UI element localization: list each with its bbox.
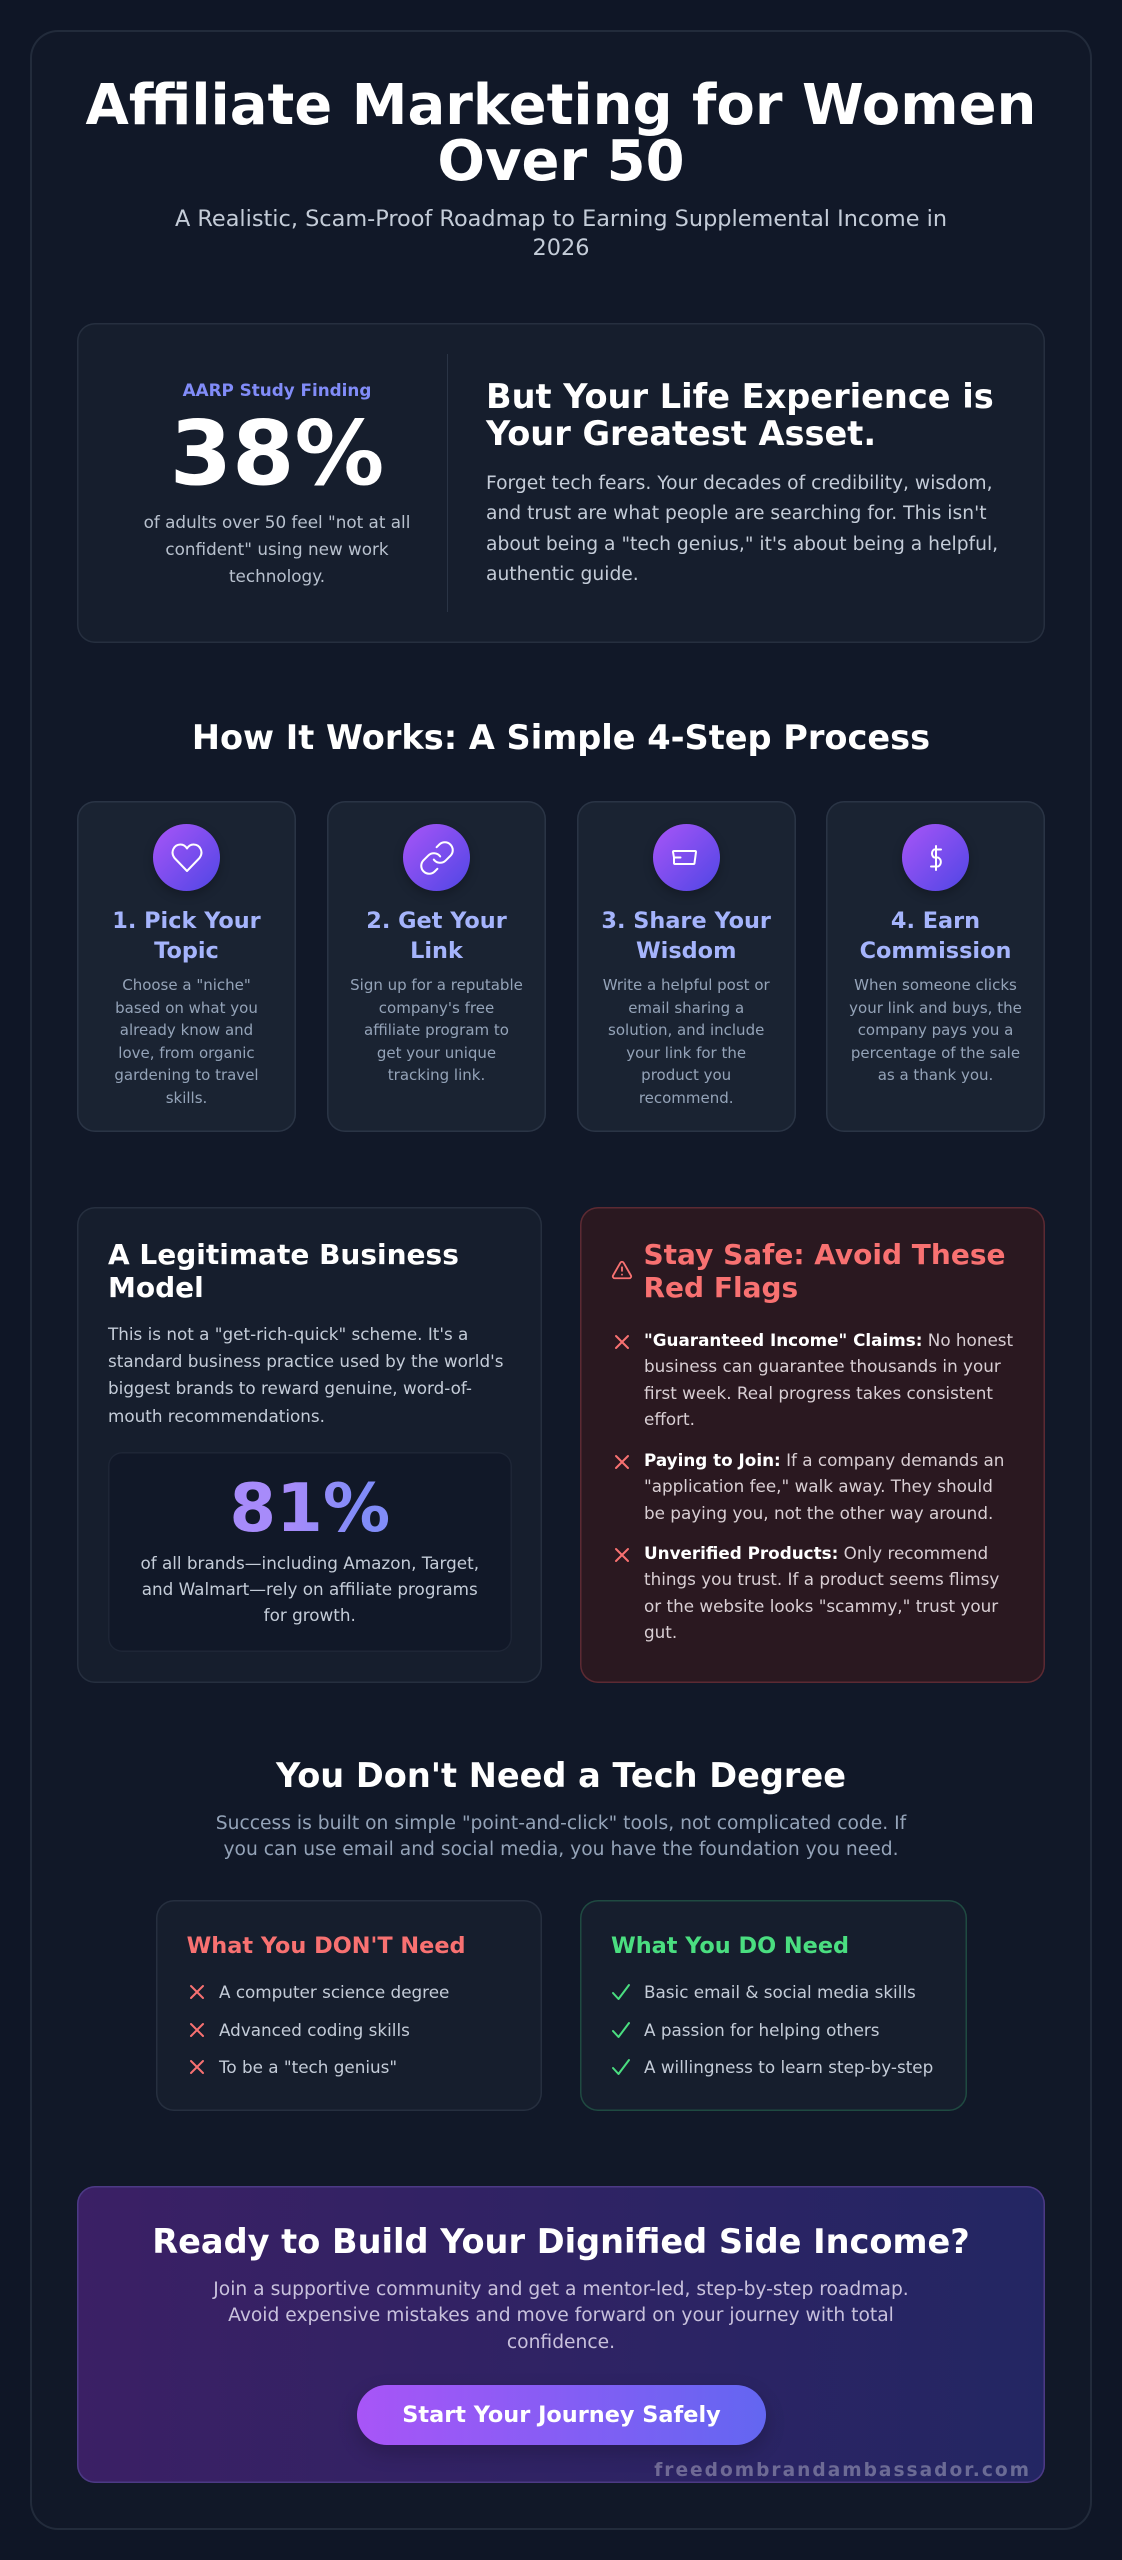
step title: 4. Earn bbox=[891, 908, 980, 934]
section description bbox=[216, 1813, 907, 1860]
section description: Success is built on simple "point-and-click" tools, not complicated code. If bbox=[216, 1813, 906, 1834]
description: Avoid expensive mistakes and move forward on your journey with total bbox=[228, 2305, 894, 2326]
panel: step 4 bbox=[826, 801, 1045, 1132]
step description: tracking link. bbox=[388, 1066, 485, 1084]
flag 3: things you trust. If a product seems flimsy bbox=[644, 1569, 999, 1589]
step title: Link bbox=[410, 938, 463, 964]
step description: your link for the bbox=[626, 1044, 746, 1062]
step title bbox=[860, 908, 1011, 964]
stat description: technology. bbox=[229, 566, 325, 586]
stat description: confident" using new work bbox=[165, 539, 389, 559]
icon: x bbox=[615, 1335, 629, 1349]
flag 3: Unverified Products: Only recommend bbox=[644, 1543, 988, 1563]
icon: x bbox=[615, 1548, 629, 1562]
step description: company pays you a bbox=[858, 1021, 1013, 1039]
body text: This is not a "get-rich-quick" scheme. It's a bbox=[108, 1324, 468, 1344]
list item: Basic email & social media skills bbox=[644, 1982, 916, 2002]
stat box: 81% bbox=[108, 1452, 512, 1652]
step description: Choose a "niche" bbox=[122, 976, 251, 994]
subtitle: 2026 bbox=[532, 235, 589, 261]
heading: tech degree: You Don't Need a Tech Degree bbox=[276, 1756, 846, 1795]
step description: email sharing a bbox=[628, 998, 744, 1016]
flag 3 bbox=[644, 1543, 999, 1642]
step title: Wisdom bbox=[636, 938, 736, 964]
list item: A computer science degree bbox=[219, 1982, 449, 2002]
divider bbox=[447, 354, 448, 612]
step title: 3. Share Your bbox=[601, 908, 771, 934]
icon: message bbox=[653, 824, 720, 891]
description: Join a supportive community and get a mentor-led, step-by-step roadmap. bbox=[213, 2279, 909, 2300]
step description: as a thank you. bbox=[878, 1066, 993, 1084]
subtitle bbox=[175, 206, 947, 261]
step description: When someone clicks bbox=[854, 976, 1017, 994]
step description: your link and buys, the bbox=[849, 998, 1022, 1016]
step description: based on what you bbox=[115, 998, 258, 1016]
body text: Forget tech fears. Your decades of credibility, wisdom, bbox=[486, 473, 993, 494]
panel: what you do need bbox=[580, 1900, 966, 2111]
body text bbox=[486, 473, 998, 585]
flag 3: or the website looks "scammy," trust your bbox=[644, 1596, 998, 1616]
heading: Model bbox=[108, 1271, 204, 1304]
title bbox=[86, 73, 1036, 194]
title: Over 50 bbox=[437, 129, 685, 194]
heading: life experience bbox=[486, 377, 994, 453]
step title bbox=[601, 908, 771, 964]
step description bbox=[849, 976, 1022, 1084]
flag 3: gut. bbox=[644, 1622, 677, 1642]
icon: x bbox=[190, 2060, 204, 2074]
stat description: and Walmart—rely on affiliate programs bbox=[142, 1579, 478, 1599]
step description: solution, and include bbox=[608, 1021, 764, 1039]
heading bbox=[644, 1238, 1006, 1304]
flag 2: "application fee," walk away. They should bbox=[644, 1476, 993, 1496]
stat description: of adults over 50 feel "not at all bbox=[144, 512, 410, 532]
step title bbox=[366, 908, 507, 964]
body text: authentic guide. bbox=[486, 564, 639, 585]
step description bbox=[350, 976, 523, 1084]
icon: x bbox=[615, 1455, 629, 1469]
panel: hero statistic bbox=[77, 323, 1045, 643]
step description: gardening to travel bbox=[114, 1066, 259, 1084]
icon: warning triangle bbox=[612, 1260, 632, 1280]
heading: A Legitimate Business bbox=[108, 1238, 459, 1271]
heading: What You DO Need bbox=[611, 1933, 849, 1959]
panel: what you don't need bbox=[156, 1900, 542, 2111]
step description: skills. bbox=[166, 1088, 207, 1106]
step description: recommend. bbox=[639, 1088, 734, 1106]
icon: x bbox=[190, 2023, 204, 2037]
step title: Topic bbox=[154, 938, 219, 964]
step title: 2. Get Your bbox=[366, 908, 507, 934]
list item: A willingness to learn step-by-step bbox=[644, 2057, 933, 2077]
panel: step 3 bbox=[577, 801, 796, 1132]
heading: life experience: Your Greatest Asset. bbox=[486, 414, 876, 453]
watermark: freedombrandambassador.com bbox=[654, 2460, 1031, 2481]
icon: link bbox=[403, 824, 470, 891]
step title bbox=[112, 908, 261, 964]
flag 2: be paying you, not the other way around. bbox=[644, 1503, 993, 1523]
stat description: of all brands—including Amazon, Target, bbox=[140, 1553, 479, 1573]
body text: biggest brands to reward genuine, word-of- bbox=[108, 1378, 472, 1398]
flag 1 bbox=[644, 1330, 1013, 1429]
heading: life experience: But Your Life Experience is bbox=[486, 377, 994, 416]
body text bbox=[108, 1324, 503, 1426]
title: Affiliate Marketing for Women bbox=[86, 73, 1036, 138]
step description: company's free bbox=[379, 998, 494, 1016]
step title: Commission bbox=[860, 938, 1011, 964]
panel: step 1 bbox=[77, 801, 296, 1132]
body text: mouth recommendations. bbox=[108, 1406, 325, 1426]
flag 1: business can guarantee thousands in your bbox=[644, 1356, 1001, 1376]
panel: call to action bbox=[77, 2186, 1045, 2483]
icon: dollar bbox=[902, 824, 969, 891]
flag 2: Paying to Join: If a company demands an bbox=[644, 1450, 1004, 1470]
step description: Sign up for a reputable bbox=[350, 976, 523, 994]
step description: percentage of the sale bbox=[851, 1044, 1020, 1062]
heading: Red Flags bbox=[644, 1271, 798, 1304]
icon: x bbox=[190, 1985, 204, 1999]
subtitle: A Realistic, Scam-Proof Roadmap to Earning Supplemental Income in bbox=[175, 206, 947, 232]
button bbox=[357, 2385, 766, 2445]
icon: check bbox=[612, 2022, 630, 2038]
flag 1: first week. Real progress takes consistent bbox=[644, 1383, 993, 1403]
flag 2 bbox=[644, 1450, 1004, 1523]
panel: step 2 bbox=[327, 801, 546, 1132]
stat: 38%: 38% bbox=[170, 402, 384, 506]
stat number bbox=[108, 1472, 512, 1544]
flag 1: effort. bbox=[644, 1409, 695, 1429]
step description: love, from organic bbox=[118, 1044, 255, 1062]
heading: how it works: How It Works: A Simple 4-Step Process bbox=[192, 718, 930, 757]
label: AARP study finding: AARP Study Finding bbox=[183, 380, 371, 400]
step description: affiliate program to bbox=[364, 1021, 509, 1039]
list item: A passion for helping others bbox=[644, 2020, 880, 2040]
heading: Stay Safe: Avoid These bbox=[644, 1238, 1006, 1271]
step description: product you bbox=[641, 1066, 731, 1084]
icon: check bbox=[612, 1984, 630, 2000]
icon: heart bbox=[153, 824, 220, 891]
body text: about being a "tech genius," it's about being a helpful, bbox=[486, 534, 998, 555]
heading: What You DON'T Need bbox=[187, 1933, 466, 1959]
stat description bbox=[144, 512, 410, 586]
button: Start Your Journey Safely bbox=[402, 2402, 721, 2428]
list item: To be a "tech genius" bbox=[219, 2057, 397, 2077]
heading: Ready to Build Your Dignified Side Income? bbox=[152, 2222, 970, 2261]
flag 1: "Guaranteed Income" Claims: No honest bbox=[644, 1330, 1013, 1350]
step description: Write a helpful post or bbox=[603, 976, 770, 994]
stat number: 81% bbox=[229, 1469, 390, 1547]
step description: get your unique bbox=[377, 1044, 496, 1062]
step description: already know and bbox=[120, 1021, 253, 1039]
list item: Advanced coding skills bbox=[219, 2020, 410, 2040]
stat description: for growth. bbox=[264, 1605, 356, 1625]
panel: red flags bbox=[580, 1207, 1045, 1683]
step description bbox=[114, 976, 259, 1106]
step title: 1. Pick Your bbox=[112, 908, 261, 934]
panel: legitimate business model bbox=[77, 1207, 542, 1683]
icon: check bbox=[612, 2059, 630, 2075]
heading bbox=[108, 1238, 459, 1304]
description: confidence. bbox=[507, 2332, 615, 2353]
stat description bbox=[140, 1553, 479, 1625]
section description: you can use email and social media, you have the foundation you need. bbox=[223, 1839, 899, 1860]
body text: standard business practice used by the world's bbox=[108, 1351, 503, 1371]
description bbox=[212, 2279, 909, 2353]
body text: and trust are what people are searching for. This isn't bbox=[486, 503, 987, 524]
step description bbox=[603, 976, 770, 1106]
